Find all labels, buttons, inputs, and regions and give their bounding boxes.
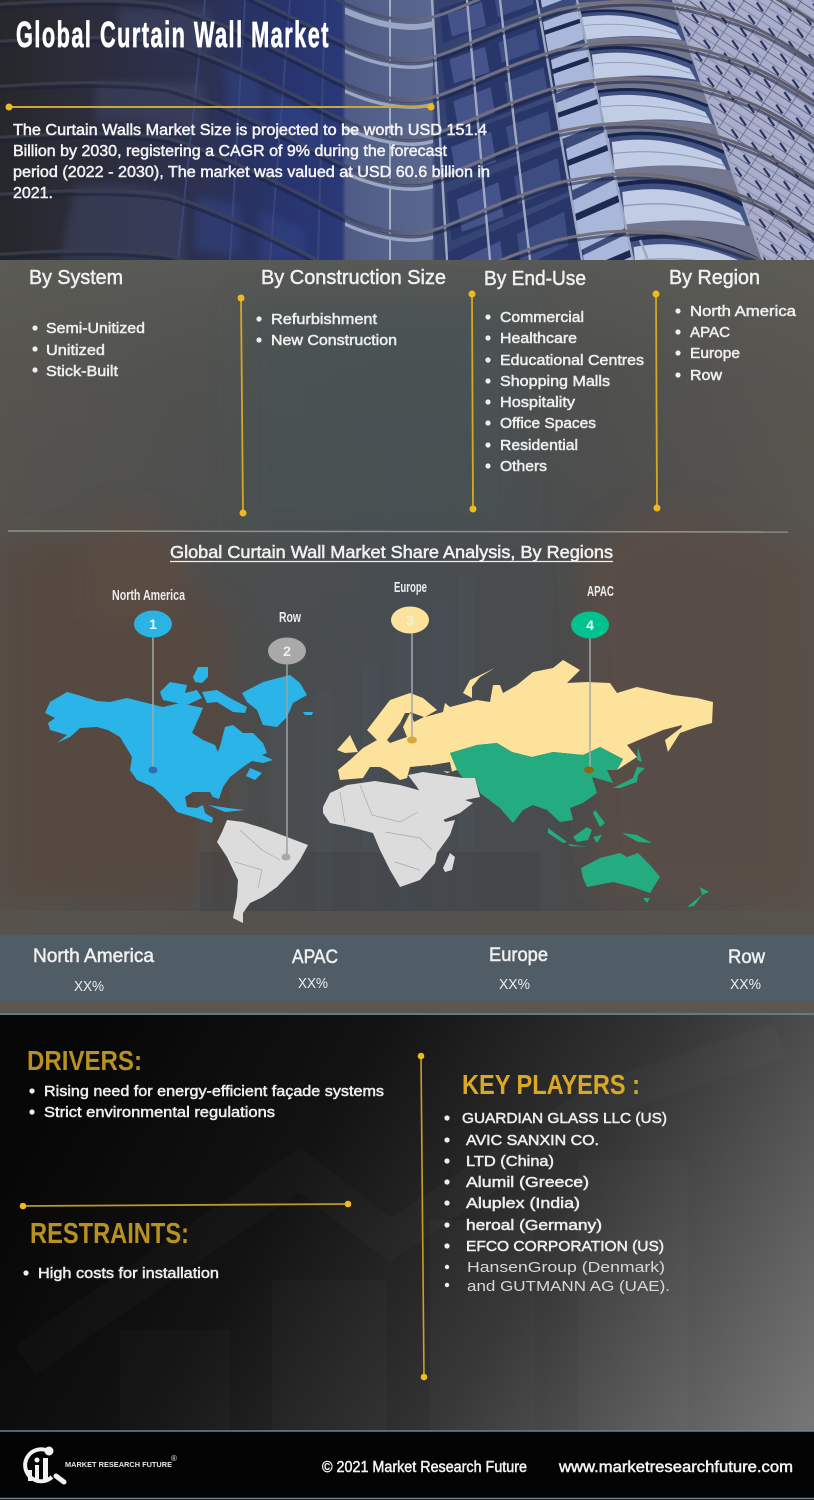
list: end uses: Residential — [500, 437, 578, 454]
key players list: LTD (China) — [466, 1153, 554, 1170]
region: Europe and Russia — [337, 660, 713, 780]
column: By System: By System — [29, 266, 123, 289]
gold divider 2 — [468, 290, 476, 512]
region: APAC — [450, 743, 709, 907]
list: end uses: Shopping Malls — [500, 373, 610, 390]
list: regions — [675, 303, 797, 384]
list: end uses: Hospitality — [500, 394, 576, 411]
drivers block: DRIVERS: — [27, 1045, 142, 1076]
map label: Europe: Europe — [394, 579, 427, 596]
list: construction types: New Construction — [271, 332, 397, 349]
legend: Row: Row — [728, 947, 765, 968]
map section heading: Global Curtain Wall Market Share Analysis, By Regions — [170, 542, 613, 562]
copyright text: © 2021 Market Research Future — [322, 1459, 527, 1476]
legend band: share by region — [0, 935, 814, 1014]
pin 1: North America — [134, 610, 172, 774]
key players list: and GUTMANN AG (UAE). — [467, 1278, 670, 1295]
key players block: KEY PLAYERS : — [462, 1069, 640, 1100]
legend: North America: North America — [33, 946, 154, 967]
region: South America and Africa, Middle East (Row) — [217, 772, 480, 923]
pin 2: Row — [268, 638, 306, 860]
icon: market research future logo — [25, 1446, 64, 1482]
key players list: heroal (Germany) — [466, 1217, 602, 1234]
list: system types: Semi-Unitized — [46, 320, 145, 337]
key players list: GUARDIAN GLASS LLC (US) — [462, 1110, 667, 1127]
intro paragraph: 2021. — [13, 185, 53, 202]
list: construction types: Refurbishment — [271, 311, 378, 328]
column: By End-Use: By End-Use — [484, 267, 586, 290]
website: www.marketresearchfuture.com — [558, 1459, 793, 1476]
column: By End-Use — [484, 267, 644, 475]
lattice facade on the right — [673, 0, 814, 260]
gold divider 1 — [238, 294, 246, 516]
legend: North America — [33, 946, 154, 995]
list: regions: Europe — [690, 345, 740, 362]
column: By Region: By Region — [669, 266, 760, 289]
legend: Europe: XX% — [499, 976, 530, 993]
legend: Row — [728, 947, 765, 993]
list: system types: Unitized — [46, 342, 105, 359]
key players list: Alumil (Greece) — [466, 1174, 589, 1191]
restraints list: High costs for installation — [38, 1265, 219, 1282]
key players list: EFCO CORPORATION (US) — [466, 1238, 664, 1255]
list: end uses: Educational Centres — [500, 352, 644, 369]
logo wordmark: MARKET RESEARCH FUTURE — [65, 1460, 172, 1469]
gold divider: drivers and restraints — [20, 1201, 351, 1209]
legend: North America: XX% — [74, 978, 104, 995]
pin 4: APAC — [571, 612, 609, 774]
key players block — [444, 1069, 670, 1295]
legend: APAC: APAC — [292, 947, 338, 968]
legend: APAC: XX% — [298, 975, 328, 992]
list: regions: Row — [690, 367, 722, 384]
legend: Row: XX% — [730, 976, 761, 993]
legend: Europe: Europe — [489, 945, 548, 966]
title: Global Curtain Wall Market — [16, 14, 330, 55]
intro paragraph: Billion by 2030, registering a CAGR of 9% during the forecast — [13, 143, 448, 160]
restraints block: RESTRAINTS: — [30, 1218, 189, 1250]
map label: Row: Row — [279, 609, 301, 626]
intro paragraph: period (2022 - 2030), The market was valued at USD 60.6 billion in — [13, 164, 490, 181]
drivers list — [29, 1083, 384, 1121]
pin 4: APAC: 4 — [586, 617, 594, 633]
column: By System — [29, 266, 145, 380]
pin 2: Row: 2 — [283, 643, 291, 659]
legend: Europe — [489, 945, 548, 993]
key players list — [444, 1110, 670, 1295]
gold divider in header — [6, 104, 434, 110]
list: end uses: Office Spaces — [500, 415, 596, 432]
column: By Region — [669, 266, 797, 384]
lower panel background — [0, 1015, 814, 1431]
restraints block — [23, 1218, 219, 1282]
list: end uses: Commercial — [500, 309, 584, 326]
inland seas — [387, 712, 452, 772]
key players list: Aluplex (India) — [466, 1195, 580, 1212]
header photo: glass building — [0, 0, 814, 260]
list: regions: North America — [690, 303, 797, 320]
pin 3: Europe: 3 — [406, 612, 414, 628]
segmentation and map panel background — [0, 260, 814, 1015]
list: construction types — [256, 311, 397, 349]
gold divider: key players — [418, 1053, 427, 1380]
registered mark: ® — [171, 1454, 177, 1463]
map label: APAC: APAC — [587, 583, 614, 600]
pin 3: Europe — [391, 606, 429, 744]
gold divider 3 — [652, 290, 660, 512]
footer — [0, 1431, 814, 1500]
drivers block — [27, 1045, 384, 1121]
list: end uses: Others — [500, 458, 547, 475]
intro paragraph: The Curtain Walls Market Size is projected to be worth USD 151.4 — [13, 122, 487, 139]
list: system types: Stick-Built — [46, 363, 119, 380]
key players list: AVIC SANXIN CO. — [466, 1132, 599, 1149]
drivers list: Rising need for energy-efficient façade systems — [44, 1083, 384, 1100]
region: North America — [45, 667, 313, 823]
column: By Construction Size: By Construction Size — [261, 266, 446, 289]
list: regions: APAC — [690, 324, 730, 341]
legend: APAC — [292, 947, 338, 992]
key players list: HansenGroup (Denmark) — [467, 1259, 665, 1276]
list: system types — [32, 320, 145, 380]
list: end uses — [485, 309, 644, 475]
world map — [45, 606, 713, 923]
list: end uses: Healthcare — [500, 330, 577, 347]
pin 1: North America: 1 — [149, 616, 157, 632]
map label: North America: North America — [112, 587, 185, 604]
column: By Construction Size — [256, 266, 446, 349]
intro paragraph — [13, 122, 490, 202]
drivers list: Strict environmental regulations — [44, 1104, 275, 1121]
floors of curved windows — [440, 0, 762, 260]
